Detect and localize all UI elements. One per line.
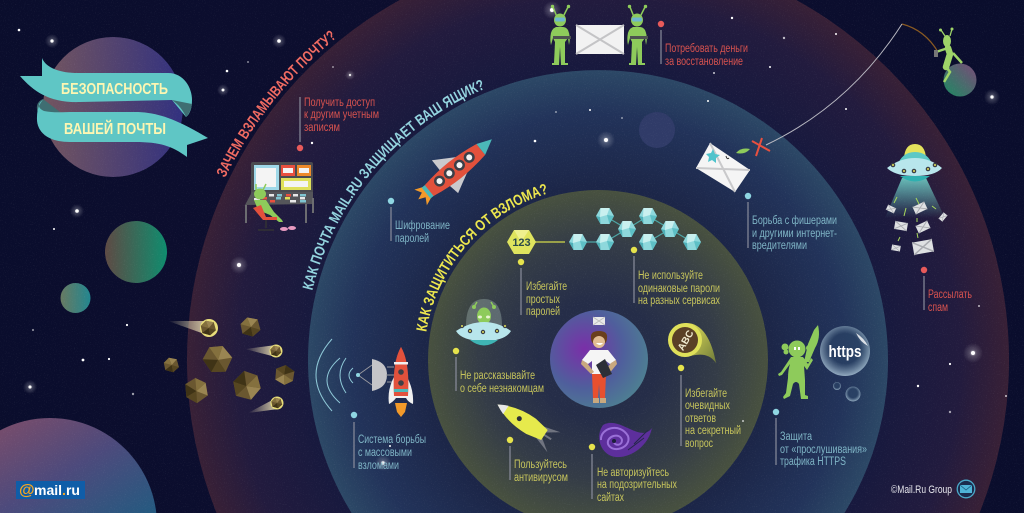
- icon: 123 badge: 123: [512, 237, 531, 249]
- comet 3: [248, 396, 284, 413]
- logo: mail.ru: @: [19, 482, 35, 499]
- curved heading: how to protect: КАК ЗАЩИТИТЬСЯ ОТ ВЗЛОМА?: [416, 184, 546, 332]
- planet: green: [105, 221, 167, 283]
- label: mass hacks: [351, 412, 426, 472]
- title text: БЕЗОПАСНОСТЬ: [61, 81, 168, 98]
- label: spam: [921, 267, 972, 314]
- icon: aliens with envelope: [550, 5, 648, 65]
- icon: goblin eavesdropper: [778, 325, 819, 399]
- label: phishers: Борьба с фишерами: [752, 215, 837, 227]
- label: simple passwords: простых: [526, 294, 560, 306]
- label: secret question: очевидных: [685, 400, 730, 412]
- label: spam: Рассылать: [928, 289, 972, 301]
- title ribbon: ВАШЕЙ ПОЧТЫ: [64, 119, 166, 138]
- icon: abc medal: ABC: [676, 329, 696, 353]
- label: ransom: [658, 21, 748, 68]
- icon: comets and asteroids: [164, 318, 297, 413]
- label: suspicious sites: сайтах: [597, 492, 624, 504]
- label: secret question: на секретный: [685, 425, 741, 437]
- label: same passwords: одинаковые пароли: [638, 283, 720, 295]
- label: phishers: и другими интернет-: [752, 228, 837, 240]
- label: secret question: Избегайте: [685, 388, 727, 400]
- label: secret question: вопрос: [685, 438, 713, 450]
- label: ransom: за восстановление: [665, 56, 743, 68]
- label: same passwords: [631, 247, 720, 307]
- label: encryption: [388, 198, 450, 245]
- label: encryption: паролей: [395, 233, 429, 245]
- curved heading: why hack: ЗАЧЕМ ВЗЛАМЫВАЮТ ПОЧТУ?: [216, 30, 334, 177]
- title ribbon: [20, 58, 208, 157]
- label: https: Защита: [780, 431, 812, 443]
- ransom envelope: [576, 25, 624, 54]
- label: antivirus: антивирусом: [514, 472, 568, 484]
- label: ransom: Потребовать деньги: [665, 43, 748, 55]
- planet: bottom left: [0, 418, 156, 513]
- logo: mail.ru: mail.ru: [34, 482, 80, 498]
- label: suspicious sites: Не авторизуйтесь: [597, 467, 669, 479]
- icon: hacker alien at console: [245, 162, 313, 231]
- label: antivirus: Пользуйтесь: [514, 459, 567, 471]
- alien right: [627, 5, 648, 65]
- label: mass hacks: взломами: [358, 460, 399, 472]
- inner circle: [428, 190, 768, 513]
- label: secret question: [678, 365, 741, 450]
- icon: spam ufo: [885, 144, 947, 255]
- label: antivirus: [507, 437, 568, 484]
- label: spam: спам: [928, 302, 948, 314]
- label: other accounts: [297, 97, 379, 151]
- label: strangers: Не рассказывайте: [460, 370, 535, 382]
- icon: mail badge: [957, 480, 975, 498]
- icon: password rocket: [405, 123, 505, 215]
- label: mass hacks: с массовыми: [358, 447, 412, 459]
- logo: mail.ru: [16, 481, 85, 499]
- icon: https bubbles: https: [828, 342, 862, 361]
- label: other accounts: записям: [304, 122, 340, 134]
- copyright: [891, 480, 975, 498]
- icon: fishing alien: [766, 24, 962, 145]
- label: same passwords: на разных сервисах: [638, 295, 720, 307]
- label: simple passwords: паролей: [526, 306, 560, 318]
- label: https: от «прослушивания»: [780, 444, 867, 456]
- label: other accounts: Получить доступ: [304, 97, 375, 109]
- label: https: [773, 409, 867, 468]
- label: suspicious sites: [589, 444, 677, 504]
- icon: abc medal: [668, 323, 716, 363]
- planet: faint blue: [639, 112, 675, 148]
- label: same passwords: Не используйте: [638, 270, 703, 282]
- label: simple passwords: [518, 259, 567, 318]
- planet: small teal: [60, 283, 90, 313]
- label: phishers: [745, 193, 837, 252]
- icon: purple swirl: [599, 423, 652, 457]
- planet: purple behind title: [43, 37, 183, 177]
- icon: 123 badge: [507, 230, 536, 254]
- comet 2: [245, 344, 282, 358]
- icon: https bubbles: [820, 326, 870, 402]
- label: https: трафика HTTPS: [780, 456, 846, 468]
- icon: person in purple sphere: [550, 310, 648, 408]
- label: strangers: [453, 348, 544, 395]
- alien left: [550, 5, 571, 65]
- label: suspicious sites: на подозрительных: [597, 479, 677, 491]
- icon: alien ufo: [456, 299, 511, 346]
- label: mass hacks: Система борьбы: [358, 434, 426, 446]
- middle circle: [308, 70, 888, 513]
- comet 1: [168, 319, 218, 337]
- icon: yellow antivirus rocket: [490, 395, 561, 452]
- icon: phishing envelope: [696, 138, 770, 192]
- label: phishers: вредителями: [752, 240, 807, 252]
- label: secret question: ответов: [685, 413, 716, 425]
- falling spam envelopes: [886, 197, 947, 255]
- icon: radar dish and rocket: [316, 339, 413, 417]
- label: strangers: о себе незнакомцам: [460, 383, 544, 395]
- planet: under fishing alien: [944, 64, 976, 96]
- icon: password hexagons: [507, 208, 701, 254]
- label: other accounts: к другим учетным: [304, 109, 379, 121]
- copyright: ©Mail.Ru Group: [891, 484, 952, 496]
- label: encryption: Шифрование: [395, 220, 450, 232]
- curved heading: how mail.ru protects: КАК ПОЧТА MAIL.RU ЗАЩИЩАЕТ ВАШ ЯЩИК?: [302, 80, 483, 290]
- label: simple passwords: Избегайте: [526, 281, 567, 293]
